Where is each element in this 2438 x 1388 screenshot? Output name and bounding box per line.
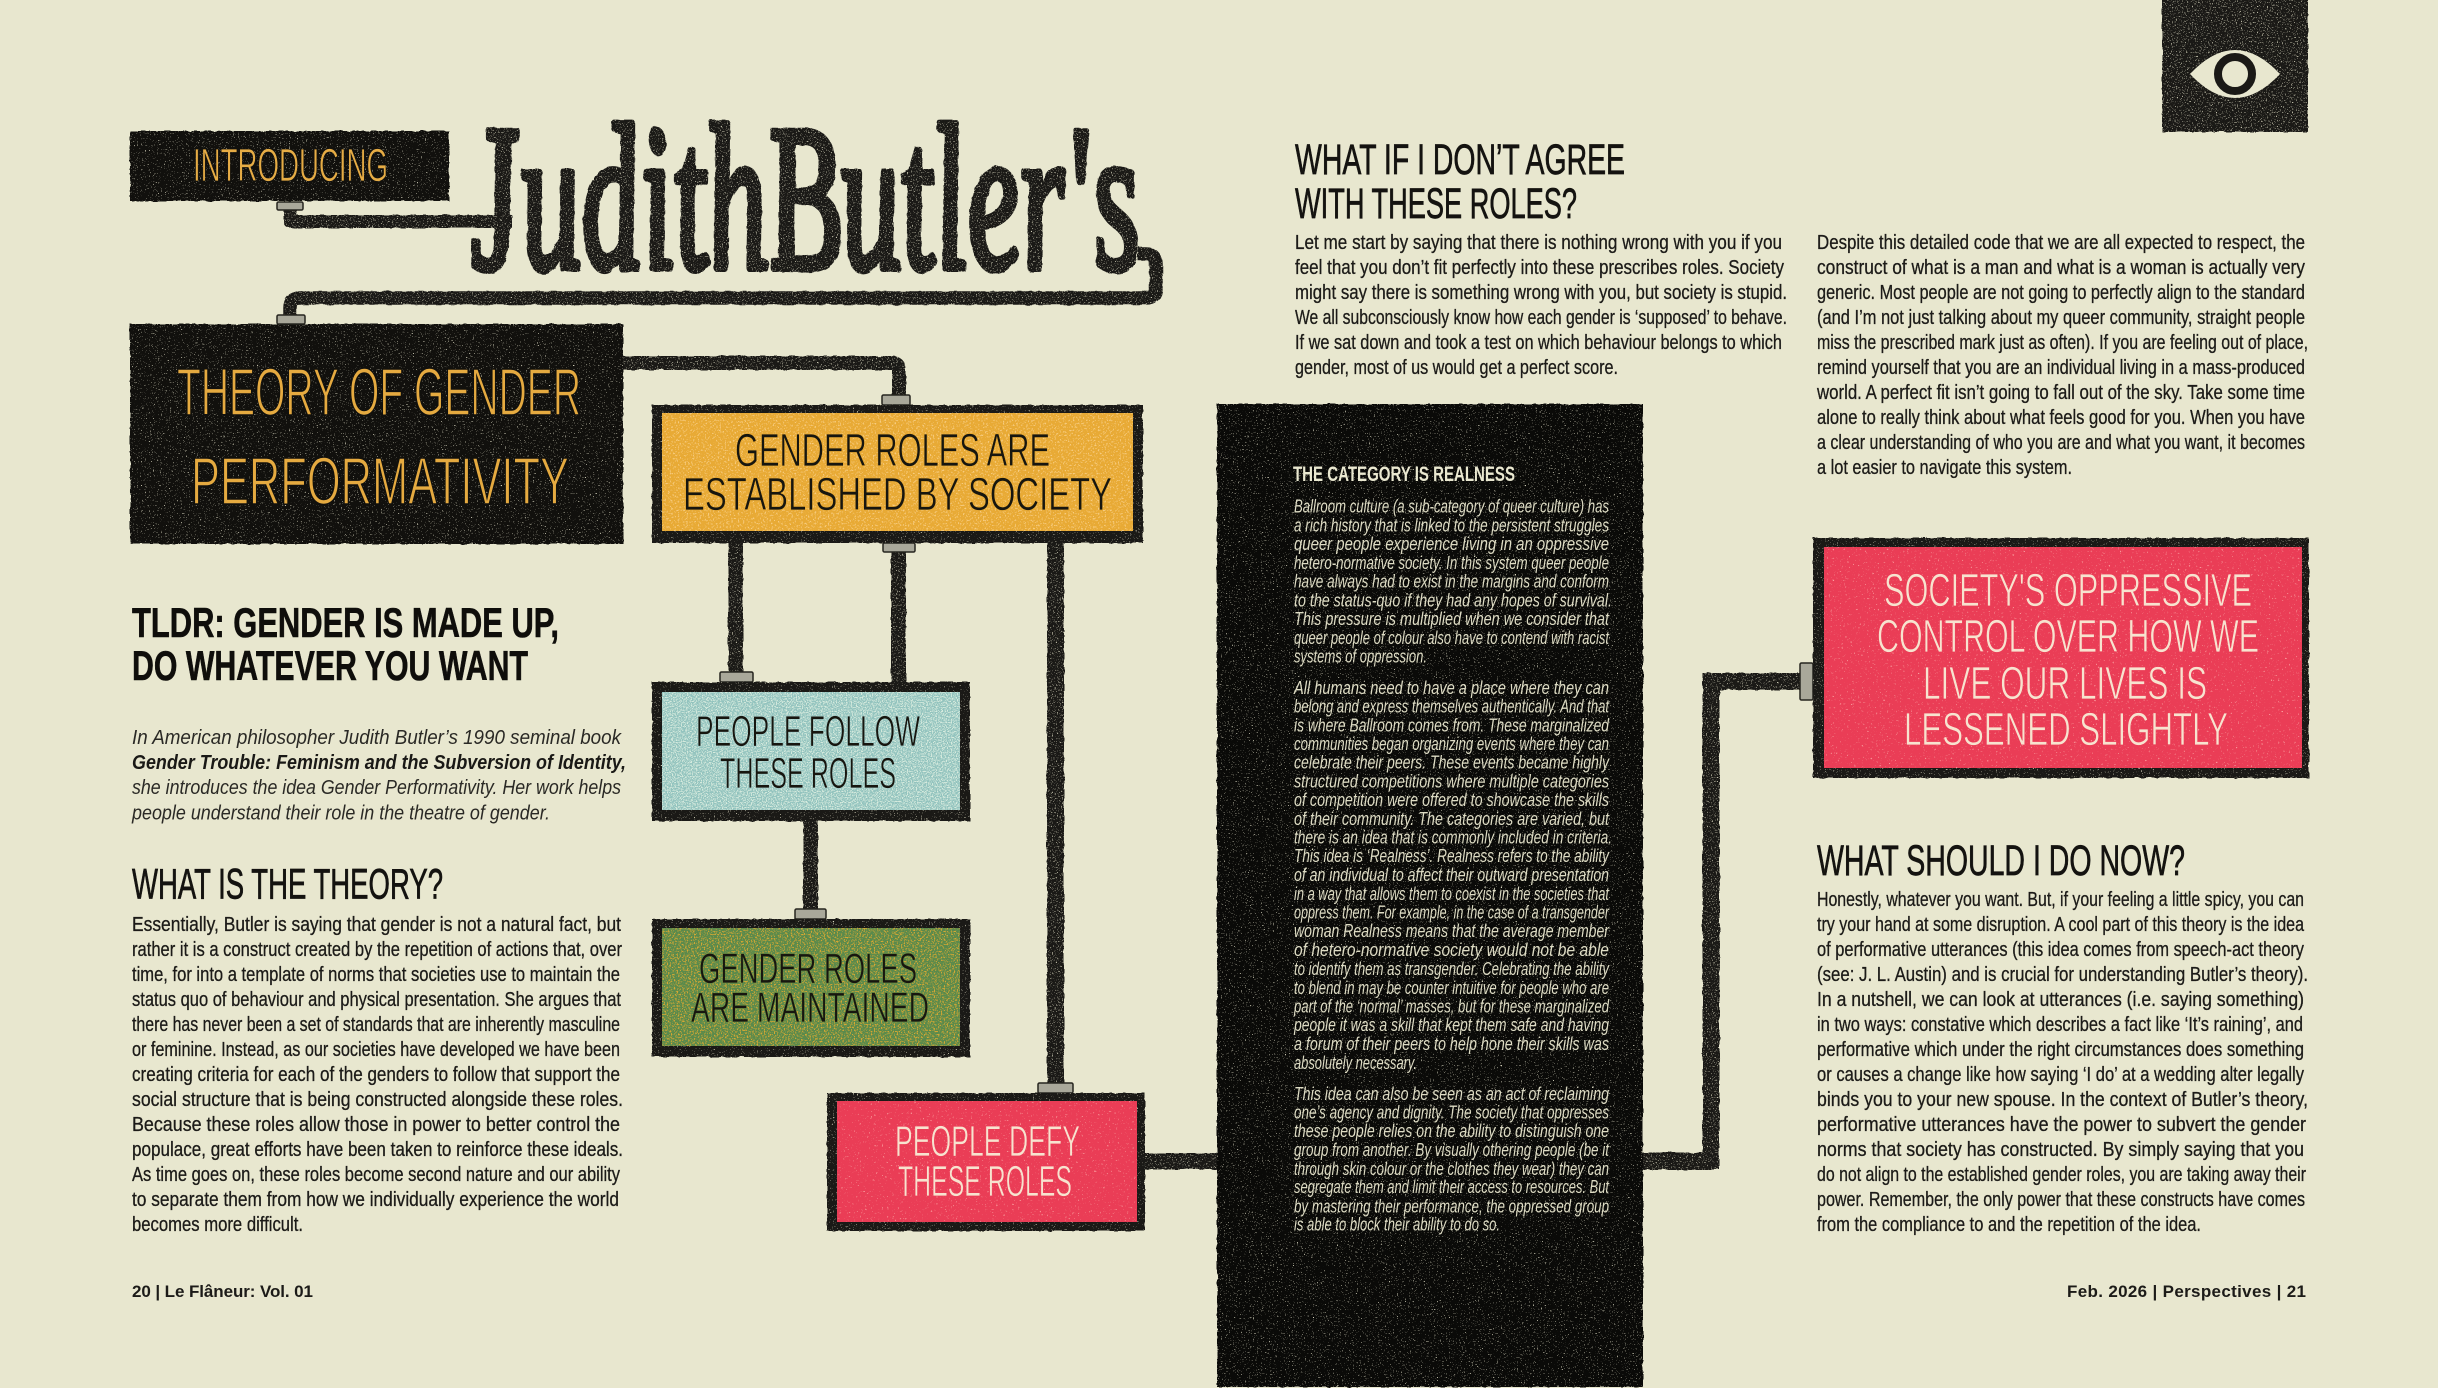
panel paragraph 2: All humans need to have a place where they can bbox=[1293, 678, 1609, 698]
box text bbox=[683, 424, 1112, 520]
pipe: people defy to category panel bbox=[1143, 1154, 1220, 1170]
intro paragraph bbox=[131, 726, 626, 824]
box text: LESSENED SLIGHTLY bbox=[1904, 703, 2228, 755]
body: what if i don't agree, column two: a clear understanding of who you are and what you want, it becomes bbox=[1817, 432, 2305, 454]
body: what should i do now: performative utterances have the power to subvert the gender bbox=[1817, 1114, 2306, 1136]
intro label text: INTRODUCING bbox=[193, 139, 388, 191]
theory box bbox=[130, 324, 623, 544]
panel paragraph 2: of hetero-normative society would not be able bbox=[1294, 940, 1609, 960]
panel paragraph 3: these people relies on the ability to distinguish one bbox=[1294, 1121, 1609, 1141]
pipe: category panel to oppressive control box bbox=[1640, 682, 1803, 1161]
body: what if i don't agree, column two: world. A perfect fit isn’t going to fall out of the sky. Take some time bbox=[1816, 382, 2305, 404]
box: people follow these roles bbox=[652, 682, 970, 821]
pipe: script title to theory box bbox=[290, 254, 1156, 318]
panel paragraph 2 bbox=[1293, 678, 1612, 1073]
pipe: gender roles to people follow, left bbox=[728, 540, 743, 674]
panel paragraph 3 bbox=[1294, 1084, 1610, 1235]
panel paragraph 3: one’s agency and dignity. The society that oppresses bbox=[1294, 1103, 1609, 1123]
body: what is the theory: As time goes on, these roles become second nature and our ability bbox=[132, 1164, 620, 1186]
panel paragraph 2: woman Realness means that the average member bbox=[1294, 921, 1610, 941]
panel paragraph 1: to the status-quo if they had any hopes of survival. bbox=[1294, 590, 1612, 610]
panel paragraph 1: Ballroom culture (a sub-category of queer culture) has bbox=[1294, 497, 1609, 517]
panel paragraph 2: communities began organizing events where they can bbox=[1294, 734, 1609, 754]
body: what should i do now: in two ways: constative which describes a fact like ‘It’s raining’, and bbox=[1817, 1014, 2303, 1036]
intro paragraph: people understand their role in the theatre of gender. bbox=[131, 802, 550, 824]
panel paragraph 2: part of the ‘normal’ masses, but for these marginalized bbox=[1293, 997, 1610, 1017]
panel paragraph 1: queer people of colour also have to contend with racist bbox=[1294, 628, 1610, 648]
box text: GENDER ROLES ARE bbox=[735, 424, 1050, 476]
body: what should i do now: In a nutshell, we can look at utterances (i.e. saying something) bbox=[1817, 989, 2304, 1011]
panel paragraph 2: a forum of their peers to help hone their skills was bbox=[1294, 1034, 1609, 1054]
body: what if i don't agree, column two: Despite this detailed code that we are all expected to respect, the bbox=[1817, 232, 2305, 254]
body: what if i don't agree, column two: a lot easier to navigate this system. bbox=[1817, 457, 2072, 479]
panel paragraph 2: in a way that allows them to coexist in the societies that bbox=[1294, 884, 1610, 904]
body: what is the theory: becomes more difficult. bbox=[132, 1214, 303, 1236]
box text: LIVE OUR LIVES IS bbox=[1923, 657, 2207, 709]
body: what should i do now: power. Remember, the only power that these constructs have comes bbox=[1817, 1189, 2305, 1211]
panel paragraph 1: This pressure is multiplied when we consider that bbox=[1294, 609, 1610, 629]
box: gender roles are established bbox=[652, 405, 1143, 543]
heading: what should i do now: WHAT SHOULD I DO NOW? bbox=[1817, 838, 2185, 885]
panel paragraph 2: of competition were offered to showcase the skills bbox=[1294, 790, 1609, 810]
body: what should i do now: try your hand at some disruption. A cool part of this theory is the idea bbox=[1817, 914, 2305, 936]
body: what should i do now: Honestly, whatever you want. But, if your feeling a little spicy, you can bbox=[1817, 889, 2304, 911]
body: what should i do now: from the compliance to and the repetition of the idea. bbox=[1817, 1214, 2201, 1236]
panel paragraph 2: of an individual to affect their outward presentation bbox=[1294, 865, 1609, 885]
connector pipes bbox=[290, 205, 1803, 1162]
body: what should i do now: (see: J. L. Austin) and is crucial for understanding Butler’s theory). bbox=[1817, 964, 2308, 986]
body: what should i do now bbox=[1817, 889, 2308, 1236]
body: what should i do now: binds you to your new spouse. In the context of Butler’s theory, bbox=[1817, 1089, 2308, 1111]
body: what should i do now: performative which under the right circumstances does something bbox=[1817, 1039, 2304, 1061]
body: what should i do now: norms that society has constructed. By simply saying that you bbox=[1817, 1139, 2304, 1161]
footer left: 20 | Le Flâneur: Vol. 01 bbox=[132, 1282, 313, 1301]
box text: THESE ROLES bbox=[720, 749, 896, 798]
body: what is the theory: there has never been a set of standards that are inherently masculine bbox=[132, 1014, 620, 1036]
panel paragraph 2: there is an idea that is commonly included in criteria. bbox=[1294, 828, 1612, 848]
panel paragraph 1: a rich history that is linked to the persistent struggles bbox=[1294, 515, 1609, 535]
body: what is the theory: to separate them from how we individually experience the world bbox=[132, 1189, 619, 1211]
body: what is the theory: Because these roles allow those in power to better control the bbox=[132, 1114, 620, 1136]
panel paragraph 1 bbox=[1294, 497, 1612, 667]
theory box heading: PERFORMATIVITY bbox=[191, 444, 569, 519]
body: what should i do now: of performative utterances (this idea comes from speech-act theory bbox=[1817, 939, 2304, 961]
box: gender roles are maintained bbox=[652, 919, 970, 1057]
body: what if i don't agree, column two: construct of what is a man and what is a woman is actually very bbox=[1817, 257, 2305, 279]
heading: what is the theory: WHAT IS THE THEORY? bbox=[132, 862, 443, 908]
panel: the category is realness bbox=[1217, 404, 1643, 1387]
body: what is the theory: rather it is a construct created by the repetition of actions that, over bbox=[132, 939, 622, 961]
body: what if i don't agree, column one: might say there is something wrong with you, but society is stupid. bbox=[1295, 282, 1787, 304]
panel paragraph 1: hetero-normative society. In this system queer people bbox=[1294, 553, 1609, 573]
panel paragraph 2: belong and express themselves authentically. And that bbox=[1294, 697, 1610, 717]
panel paragraph 3: segregate them and limit their access to resources. But bbox=[1294, 1177, 1610, 1197]
body: what if i don't agree, column one: Let me start by saying that there is nothing wrong with you if you bbox=[1295, 232, 1782, 254]
box text: THESE ROLES bbox=[898, 1157, 1072, 1206]
body: what if i don't agree, column two bbox=[1816, 232, 2308, 479]
body: what is the theory: time, for into a template of norms that societies use to maintain the bbox=[132, 964, 620, 986]
intro paragraph: she introduces the idea Gender Performativity. Her work helps bbox=[132, 776, 621, 799]
panel paragraph 1: systems of oppression. bbox=[1294, 647, 1427, 667]
panel paragraph 2: to identify them as transgender. Celebrating the ability bbox=[1294, 959, 1610, 979]
body: what if i don't agree, column two: remind yourself that you are an individual living in a mass-produced bbox=[1817, 357, 2305, 379]
panel paragraph 2: This idea is ‘Realness’. Realness refers to the ability bbox=[1294, 846, 1610, 866]
body: what is the theory: or feminine. Instead, as our societies have developed we have been bbox=[132, 1039, 620, 1061]
panel paragraph 2: is where Ballroom comes from. These marginalized bbox=[1294, 715, 1610, 735]
body: what if i don't agree, column one: We all subconsciously know how each gender is ‘supposed’ to behave. bbox=[1295, 307, 1787, 329]
script title: JudithButler's bbox=[456, 83, 1148, 314]
intro paragraph: In American philosopher Judith Butler’s 1990 seminal book bbox=[132, 726, 623, 749]
panel paragraph 1: have always had to exist in the margins and conform bbox=[1294, 572, 1609, 592]
box text: ESTABLISHED BY SOCIETY bbox=[683, 468, 1112, 520]
panel heading: THE CATEGORY IS REALNESS bbox=[1293, 463, 1515, 486]
pipe: people follow to roles maintained bbox=[803, 818, 818, 912]
box text: PEOPLE FOLLOW bbox=[696, 707, 920, 756]
panel paragraph 2: celebrate their peers. These events became highly bbox=[1294, 753, 1610, 773]
panel paragraph 2: oppress them. For example, in the case of a transgender bbox=[1294, 902, 1610, 922]
body: what is the theory: creating criteria for each of the genders to follow that support the bbox=[132, 1064, 620, 1086]
panel paragraph 3: through skin colour or the clothes they wear) they can bbox=[1294, 1159, 1609, 1179]
body: what if i don't agree, column two: alone to really think about what feels good for you. When you have bbox=[1817, 407, 2305, 429]
heading: what if i don't agree: WHAT IF I DON’T AGREE bbox=[1295, 137, 1625, 184]
heading: what if i don't agree bbox=[1295, 137, 1625, 228]
box text: PEOPLE DEFY bbox=[895, 1117, 1080, 1166]
heading: what if i don't agree: WITH THESE ROLES? bbox=[1295, 181, 1577, 228]
box: people defy these roles bbox=[827, 1093, 1145, 1231]
body: what is the theory: populace, great efforts have been taken to reinforce these ideals. bbox=[132, 1139, 623, 1161]
intro label box bbox=[130, 131, 449, 201]
pipe: gender roles to people defy bbox=[1047, 540, 1064, 1085]
box text bbox=[691, 945, 929, 1032]
body: what is the theory: Essentially, Butler is saying that gender is not a natural fact, but bbox=[132, 914, 621, 936]
body: what is the theory: social structure that is being constructed alongside these roles. bbox=[132, 1089, 623, 1111]
box text bbox=[895, 1117, 1080, 1206]
theory box heading bbox=[177, 355, 581, 519]
panel paragraph 3: by mastering their performance, the oppressed group bbox=[1294, 1197, 1609, 1217]
body: what if i don't agree, column two: (and I’m not just talking about my queer community, straight people bbox=[1817, 307, 2305, 329]
panel paragraph 1: queer people experience living in an oppressive bbox=[1294, 534, 1609, 554]
body: what if i don't agree, column one bbox=[1295, 232, 1787, 379]
connector caps bbox=[277, 202, 1813, 1093]
heading: tldr: TLDR: GENDER IS MADE UP, bbox=[132, 599, 559, 646]
box text bbox=[1877, 564, 2259, 755]
theory box heading: THEORY OF GENDER bbox=[177, 355, 581, 430]
intro paragraph: Gender Trouble: Feminism and the Subversion of Identity, bbox=[132, 751, 626, 774]
body: what if i don't agree, column two: miss the prescribed mark just as often). If you are feeling out of place, bbox=[1817, 332, 2308, 354]
body: what should i do now: or causes a change like how saying ‘I do’ at a wedding alter legally bbox=[1817, 1064, 2304, 1086]
panel paragraph 2: people it was a skill that kept them safe and having bbox=[1293, 1015, 1609, 1035]
body: what if i don't agree, column one: gender, most of us would get a perfect score. bbox=[1295, 357, 1618, 379]
panel paragraph 3: This idea can also be seen as an act of reclaiming bbox=[1294, 1084, 1609, 1104]
box text: GENDER ROLES bbox=[699, 945, 917, 993]
pipe: introducing to script title bbox=[290, 205, 512, 222]
heading: tldr: DO WHATEVER YOU WANT bbox=[132, 642, 528, 689]
body: what if i don't agree, column one: If we sat down and took a test on which behaviour belongs to which bbox=[1295, 332, 1782, 354]
panel paragraph 3: group from another. By visually othering people (be it bbox=[1294, 1140, 1610, 1160]
panel paragraph 2: absolutely necessary. bbox=[1294, 1053, 1417, 1073]
box: oppressive control lessened bbox=[1813, 538, 2309, 778]
box text: SOCIETY'S OPPRESSIVE bbox=[1884, 564, 2252, 616]
body: what if i don't agree, column two: generic. Most people are not going to perfectly align to the standard bbox=[1817, 282, 2305, 304]
box text bbox=[696, 707, 920, 798]
panel paragraph 2: of their community. The categories are varied, but bbox=[1294, 809, 1610, 829]
body: what is the theory: status quo of behaviour and physical presentation. She argues that bbox=[132, 989, 621, 1011]
pipe: gender roles to people follow, middle bbox=[891, 548, 906, 685]
panel paragraph 2: structured competitions where multiple categories bbox=[1294, 771, 1609, 791]
icon: eye tab bbox=[2162, 0, 2308, 132]
body: what should i do now: do not align to the established gender roles, you are taking away their bbox=[1817, 1164, 2306, 1186]
heading: tldr bbox=[132, 599, 559, 689]
footer right: Feb. 2026 | Perspectives | 21 bbox=[2067, 1282, 2306, 1301]
panel paragraph 2: to blend in may be counter intuitive for people who are bbox=[1294, 978, 1609, 998]
box text: ARE MAINTAINED bbox=[691, 984, 929, 1032]
panel paragraph 3: is able to block their ability to do so. bbox=[1294, 1215, 1500, 1235]
body: what is the theory bbox=[132, 914, 623, 1236]
body: what if i don't agree, column one: feel that you don’t fit perfectly into these prescribes roles. Society bbox=[1295, 257, 1784, 279]
pipe: theory box to gender roles box bbox=[620, 363, 899, 398]
